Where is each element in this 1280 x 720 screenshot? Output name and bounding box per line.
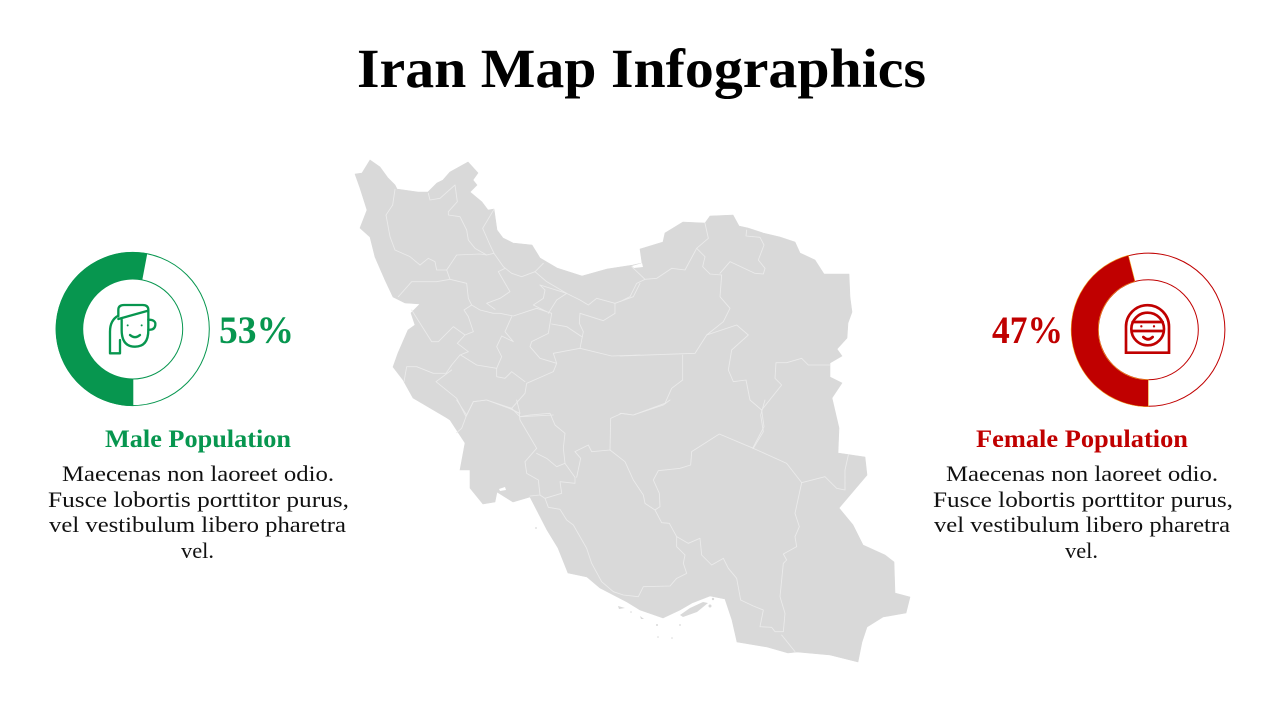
text block: male description: Fusce lobortis porttitor purus, [48,487,349,512]
text block: female description [933,461,1233,563]
panel: male population [48,252,349,563]
province borders: north-west [386,185,640,417]
title: Iran Map Infographics [357,38,926,99]
text block: male description: vel vestibulum libero pharetra [49,512,346,537]
text block: male description: Maecenas non laoreet odio. [62,461,334,486]
text block: female description: vel vestibulum libero pharetra [934,512,1230,537]
icon: male face with cap [110,305,155,353]
donut: male 53% [56,252,209,406]
percentage: male: 53% [219,309,294,352]
panel: female population [933,253,1233,563]
map: Iran provinces [355,160,910,662]
province borders: south [457,400,848,652]
text block: male description [48,461,349,563]
heading: female population: Female Population [976,426,1188,453]
donut: female 47% [1071,253,1225,407]
gulf and lagoon gaps [499,263,643,491]
islands [535,527,714,639]
text block: female description: vel. [1065,538,1098,563]
icon: female face with headscarf [1126,305,1169,353]
text block: female description: Fusce lobortis porttitor purus, [933,487,1233,512]
heading: male population: Male Population [105,426,291,453]
text block: male description: vel. [181,538,214,563]
percentage: female: 47% [992,309,1063,352]
text block: female description: Maecenas non laoreet odio. [946,461,1218,486]
province borders: north-east [620,223,830,448]
